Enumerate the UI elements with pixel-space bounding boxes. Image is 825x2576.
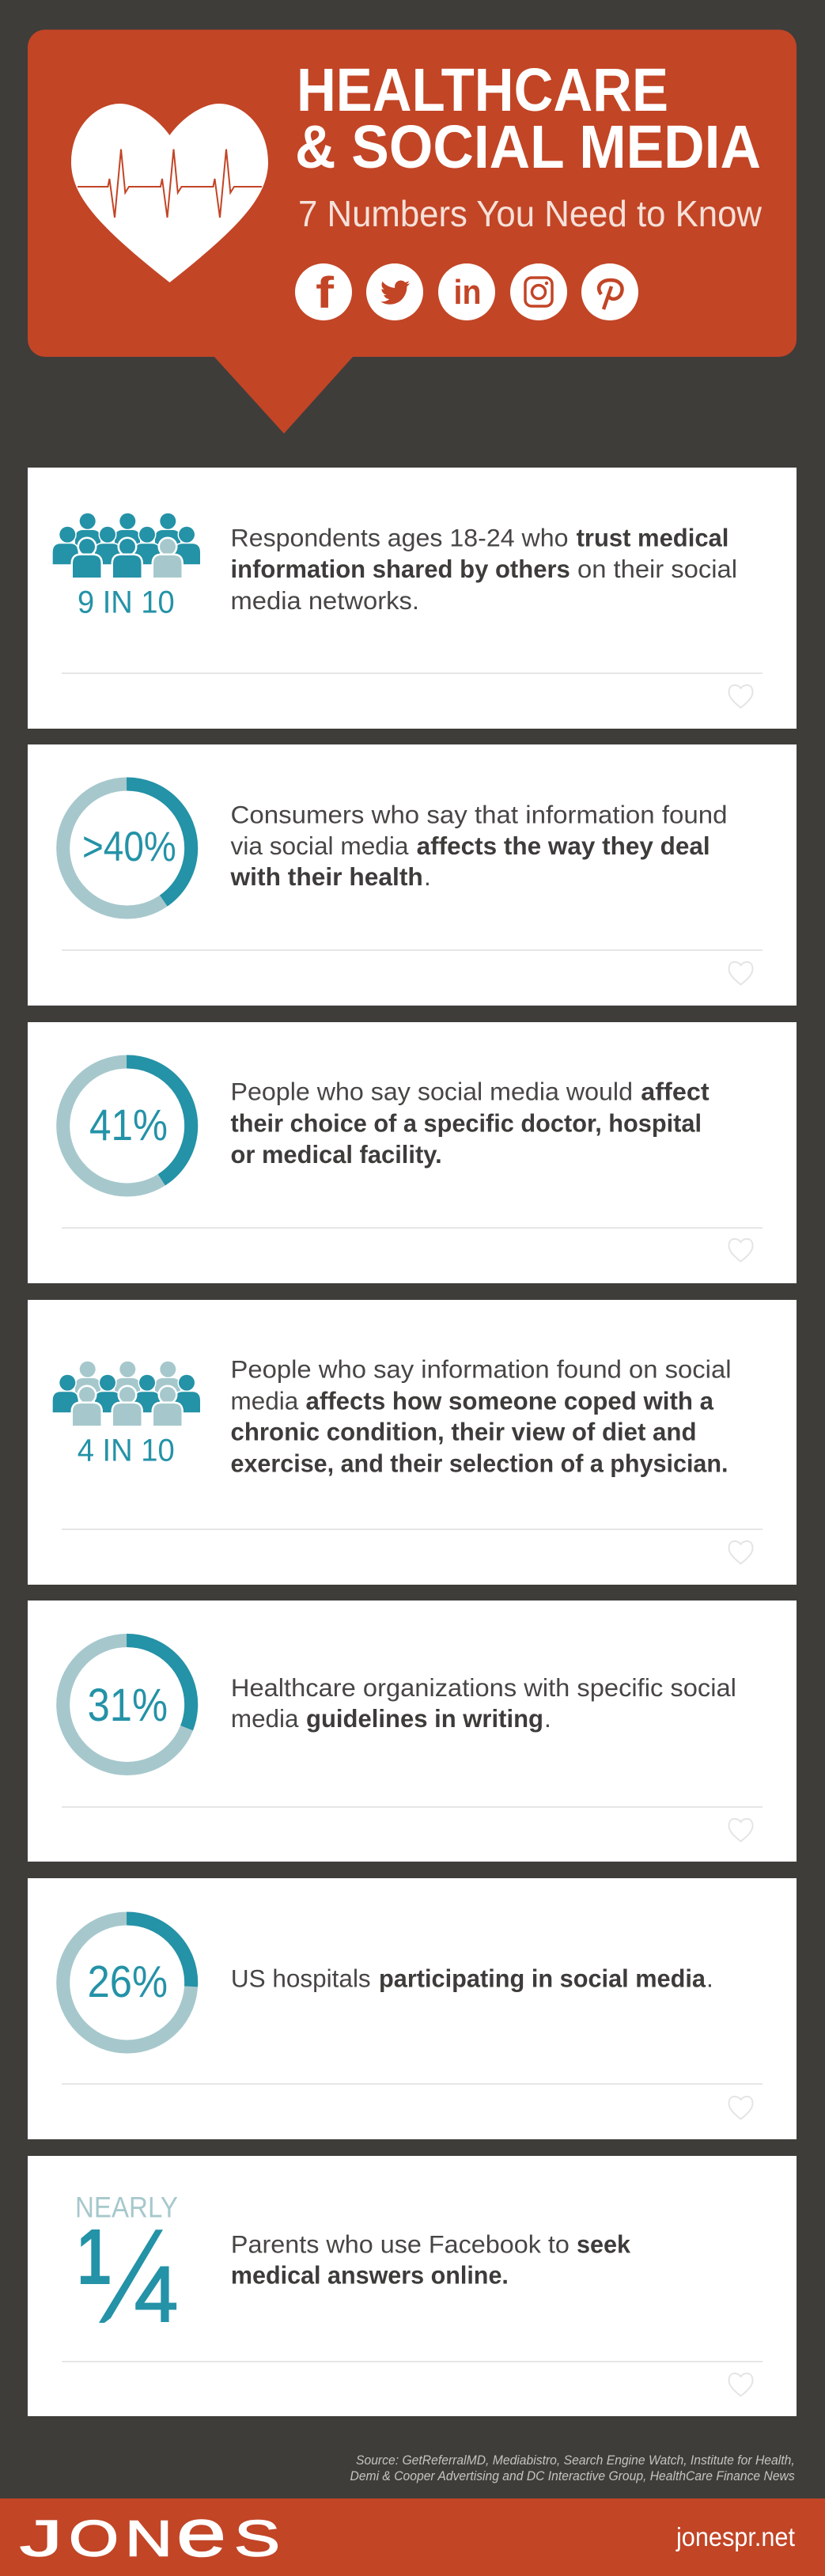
text block: Consumers who say that information found [231,801,728,829]
icon: like heart [729,1541,753,1563]
panel: 41% [28,1022,797,1283]
title [295,56,761,181]
text block: guidelines in writing [306,1704,543,1733]
stat: 31%: 31% [88,1680,168,1731]
text block: US hospitals [231,1964,371,1992]
card background [28,1300,797,1585]
text block: seek [577,2229,630,2258]
text block: or medical facility. [231,1140,442,1169]
text block: affect [641,1078,710,1106]
icon: instagram [510,263,567,320]
text block: their choice of a specific doctor, hospital [231,1109,702,1138]
icon: linkedin: in [454,273,481,312]
source note: Source: GetReferralMD, Mediabistro, Search Engine Watch, Institute for Health, [356,2453,795,2468]
card background [28,744,797,1006]
icon: like heart [729,2097,753,2119]
stat: one quarter fraction: 1 [77,2213,112,2301]
text block: . [706,1964,713,1992]
footer bar [0,2496,825,2576]
stat label: nearly: NEARLY [75,2191,178,2224]
donut chart: 31% [63,1641,191,1769]
text block [231,2229,630,2290]
logo: Jones: J [20,2510,62,2567]
text block: People who say information found on social [231,1355,731,1384]
title: & SOCIAL MEDIA [295,113,761,181]
icon: like heart [729,2373,753,2396]
card background [28,1878,797,2139]
source note [350,2453,795,2483]
card background [28,2156,797,2416]
panel: 31% [28,1601,797,1862]
source note: Demi & Cooper Advertising and DC Interactive Group, HealthCare Finance News [350,2468,795,2483]
text block: affects how someone coped with a [305,1387,713,1415]
card background [28,1022,797,1283]
text block [231,1964,713,1992]
icon: like heart [729,962,753,984]
text block: on their social [577,555,737,583]
text block: media [231,1387,299,1415]
icon: facebook: f [316,267,334,317]
panel: nearly one quarter [28,2156,797,2416]
title: HEALTHCARE [297,56,668,124]
icon: facebook [295,263,352,320]
logo: Jones [20,2496,280,2570]
card background [28,468,797,729]
text block: information shared by others [231,555,570,583]
stat: one quarter fraction: 4 [134,2250,178,2338]
text block [231,1355,731,1478]
donut chart: 41% [63,1062,191,1190]
stat: 41%: 41% [89,1100,168,1150]
panel: 9 in 10 [28,468,797,729]
text block: medical answers online. [231,2261,509,2290]
text block: . [424,862,431,891]
logo: Jones: e [176,2496,226,2570]
text block: affects the way they deal [417,832,710,860]
card background [28,1601,797,1862]
website address: jonespr.net [676,2522,795,2551]
social icons [295,263,638,320]
text block: Respondents ages 18-24 who [231,524,568,552]
text block: with their health [229,862,423,891]
text block: Parents who use Facebook to [231,2229,570,2258]
panel: 26% [28,1878,797,2139]
text block: media [231,1704,299,1733]
stat: >40%: >40% [82,824,176,870]
icon: group of people, 9 of 10 highlighted [53,513,200,578]
icon: linkedin [438,263,495,320]
stat: one quarter fraction [77,2213,178,2338]
text block: via social media [231,832,409,860]
donut chart: 40% [63,784,191,912]
text block: Healthcare organizations with specific social [231,1673,736,1702]
icon: like heart [729,1819,753,1842]
stat: 26%: 26% [88,1957,168,2007]
subtitle: 7 Numbers You Need to Know [298,193,763,234]
icon: heart with heartbeat [71,104,268,282]
text block [231,1673,736,1733]
bubble pointer [214,356,354,434]
text block: exercise, and their selection of a physician. [231,1449,728,1478]
text block: media networks. [231,586,419,615]
icon: like heart [729,685,753,707]
stat: 9 in 10: 9 IN 10 [78,585,175,619]
text block [231,524,737,615]
icon: group of people, 4 of 10 highlighted [53,1362,200,1426]
text block: . [544,1704,551,1733]
logo: Jones: N [125,2510,172,2567]
header speech bubble [28,30,797,434]
text block [231,1078,710,1169]
logo: Jones: O [69,2510,119,2567]
text block: participating in social media [379,1964,706,1992]
icon: like heart [729,1239,753,1261]
donut chart: 26% [63,1919,191,2047]
text block: chronic condition, their view of diet and [231,1418,696,1446]
text block [229,801,728,891]
stat: 4 in 10: 4 IN 10 [78,1434,175,1468]
icon: twitter [366,263,423,320]
text block: People who say social media would [231,1078,633,1106]
bubble body [28,30,797,357]
icon: pinterest [581,263,638,320]
logo: Jones: S [234,2510,280,2567]
text block: trust medical [577,524,728,552]
panel: more than 40% [28,744,797,1006]
panel: 4 in 10 [28,1300,797,1585]
